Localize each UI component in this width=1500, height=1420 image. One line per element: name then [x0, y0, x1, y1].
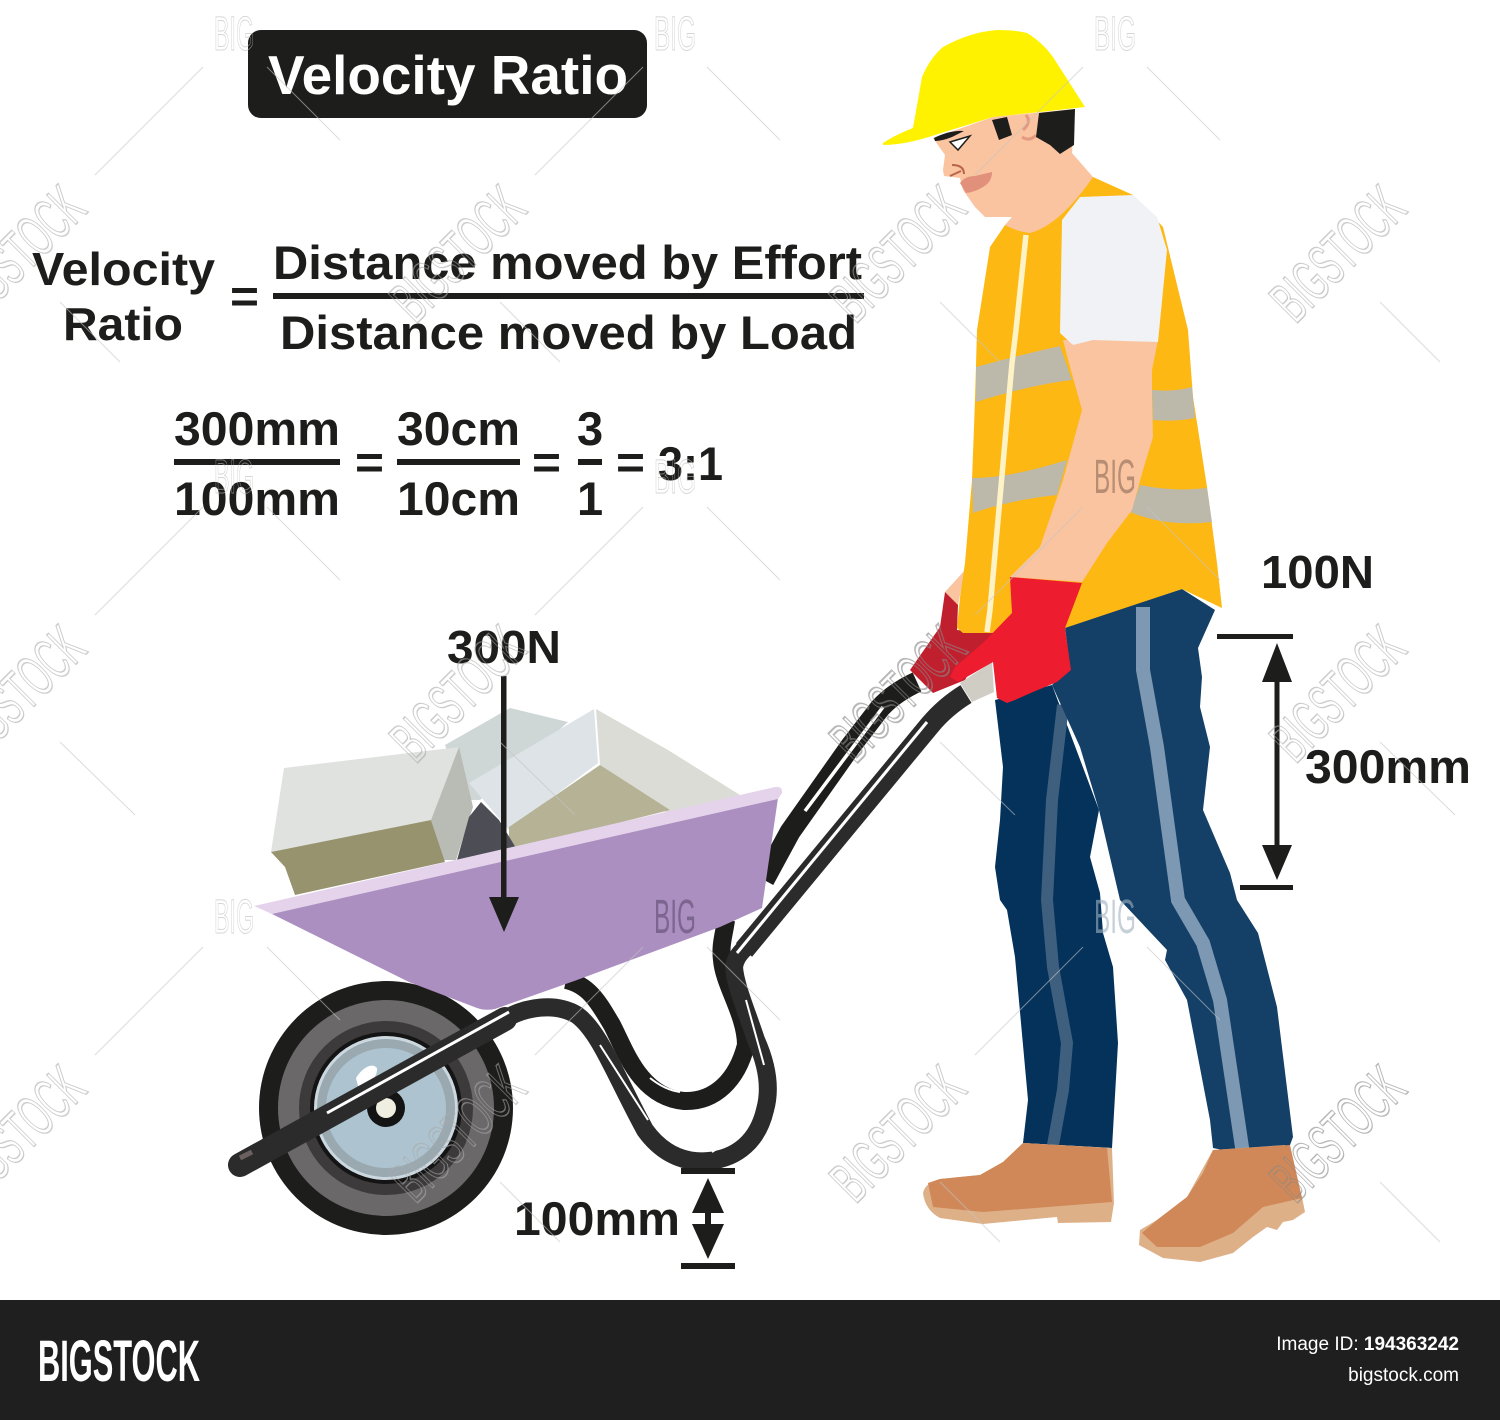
300mm dimension — [1217, 634, 1471, 890]
formula: worked calculation: 1 — [577, 472, 603, 525]
watermark: BIG — [654, 8, 696, 61]
watermark: BIG — [214, 8, 254, 61]
front boot — [1139, 1145, 1305, 1262]
watermark: BIGSTOCK — [377, 1053, 538, 1214]
watermark: BIGSTOCK — [817, 613, 978, 774]
formula: velocity ratio definition: = — [230, 270, 259, 322]
footer bar: BIGSTOCK — [38, 1329, 200, 1394]
watermark: BIG — [1094, 891, 1136, 944]
formula: worked calculation: = — [532, 436, 561, 488]
100N label: 100N — [1261, 546, 1374, 598]
watermark: BIG — [1094, 451, 1136, 504]
head and neck — [933, 109, 1093, 233]
watermark: BIGSTOCK — [377, 173, 538, 334]
eyebrow — [934, 131, 964, 141]
front frame tube and handle — [240, 694, 966, 1165]
far leg stripe — [1047, 705, 1067, 1145]
formula: velocity ratio definition: Distance moved by Load — [280, 306, 857, 359]
nose lines — [950, 165, 964, 176]
footer bar: bigstock.com — [1348, 1365, 1459, 1386]
watermark: BIGSTOCK — [377, 613, 538, 774]
wheel — [259, 981, 513, 1235]
formula: worked calculation — [174, 402, 723, 525]
far arm and glove — [910, 570, 993, 693]
formula: worked calculation: = — [616, 436, 645, 488]
boots — [923, 1143, 1305, 1262]
formula: worked calculation: = — [355, 436, 384, 488]
title — [248, 30, 647, 118]
formula: worked calculation: 10cm — [397, 472, 520, 525]
formula: velocity ratio definition: Velocity — [32, 243, 215, 295]
formula: worked calculation: 100mm — [174, 472, 340, 525]
watermark: BIGSTOCK — [817, 1053, 978, 1214]
wheelbarrow — [240, 682, 966, 1235]
near glove — [950, 577, 1082, 703]
mouth — [960, 172, 992, 193]
watermark: BIG — [654, 891, 696, 944]
watermark: BIGSTOCK — [817, 173, 978, 334]
watermark: BIG — [654, 451, 696, 504]
300N load arrow: 300N — [447, 621, 561, 673]
tray — [254, 787, 782, 1010]
100mm dimension — [514, 1168, 735, 1269]
eye — [950, 136, 970, 150]
hard hat — [883, 30, 1085, 145]
formula: worked calculation: 300mm — [174, 402, 340, 455]
shirt sleeve — [1060, 195, 1167, 345]
worker — [883, 30, 1305, 1262]
watermark: BIG — [214, 891, 254, 944]
formula: worked calculation: 3 — [577, 402, 603, 455]
formula: worked calculation: 30cm — [397, 402, 520, 455]
near leg stripe — [1143, 607, 1243, 1154]
footer bar: Image ID: 194363242 — [1276, 1334, 1459, 1355]
formula: velocity ratio definition: Distance moved by Effort — [273, 236, 862, 289]
watermark: BIG — [1094, 8, 1136, 61]
formula: velocity ratio definition — [32, 236, 864, 359]
300N load arrow — [447, 621, 561, 932]
formula: worked calculation: 3:1 — [658, 437, 723, 490]
trousers — [995, 589, 1293, 1155]
watermark: BIG — [214, 451, 254, 504]
near arm — [1010, 340, 1158, 582]
footer bar — [0, 1300, 1500, 1420]
far leg — [995, 685, 1118, 1148]
far frame tube and handle — [566, 682, 917, 1101]
rear boot — [923, 1143, 1114, 1224]
300mm dimension: 300mm — [1305, 740, 1471, 793]
formula: velocity ratio definition: Ratio — [63, 298, 183, 350]
vest — [957, 177, 1222, 633]
100mm dimension: 100mm — [514, 1192, 680, 1245]
near leg — [1052, 589, 1293, 1155]
rocks — [271, 708, 740, 895]
title: Velocity Ratio — [268, 44, 628, 106]
